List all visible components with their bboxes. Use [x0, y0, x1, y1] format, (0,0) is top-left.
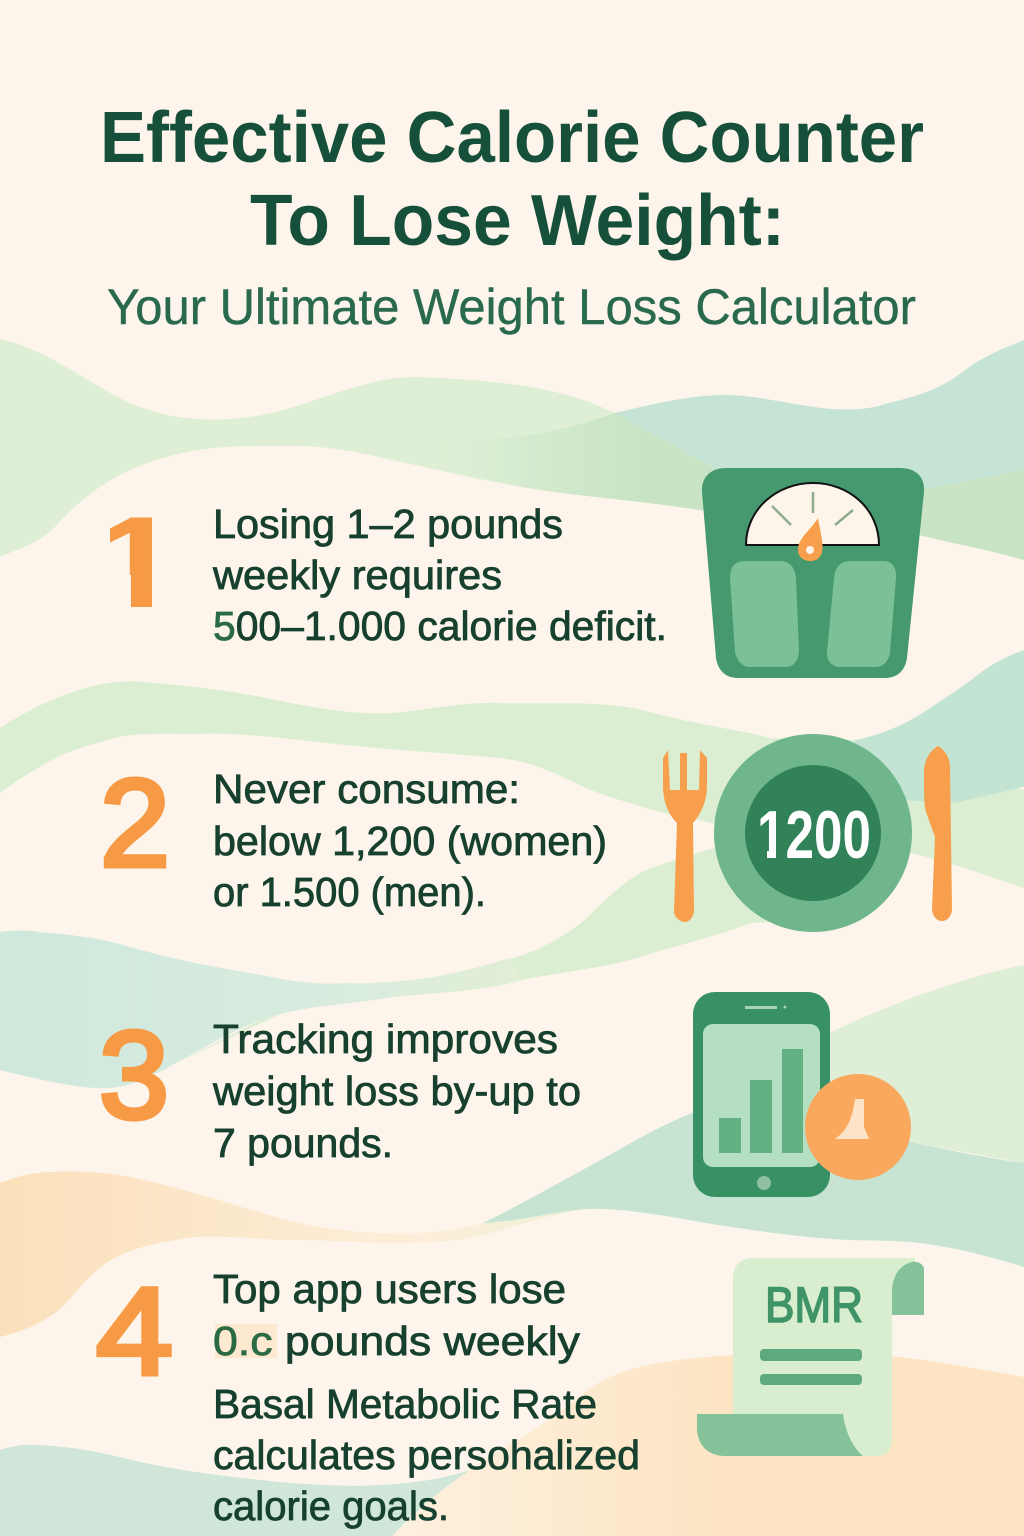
- icon: knife: [924, 746, 952, 921]
- highlight behind 0.c: [215, 1324, 277, 1358]
- wave: top light green: [0, 339, 1024, 560]
- text block 4: 0.c pounds weekly: [213, 1318, 581, 1364]
- icon: plate with 1200: 1200: [757, 797, 871, 873]
- icon: BMR document: BMR: [765, 1277, 863, 1333]
- text block 1: Losing 1–2 pounds: [213, 501, 563, 547]
- icon: fork: [663, 750, 707, 922]
- wave: lower right blue green: [483, 1100, 1024, 1267]
- background waves: [0, 339, 1024, 1536]
- text block 4: Basal Metabolic Rate: [213, 1381, 597, 1427]
- item 1: [92, 468, 924, 678]
- wave: lower right orange: [392, 1352, 1024, 1536]
- icon: bathroom scale: [702, 468, 924, 678]
- title: [100, 98, 924, 261]
- wave: middle light green: [0, 681, 1024, 888]
- item 2: [100, 734, 952, 932]
- text block 2: Never consume:: [213, 766, 520, 812]
- text block 4: [213, 1266, 640, 1529]
- wave: right light green: [692, 965, 1024, 1163]
- icon: plate with 1200: [714, 734, 912, 932]
- text block 2: below 1,200 (women): [213, 818, 607, 864]
- text block 2: or 1.500 (men).: [213, 869, 486, 915]
- text block 1: [212, 501, 667, 649]
- text block 2: [213, 766, 607, 915]
- wave: lower middle light green: [176, 845, 810, 1063]
- icon: orange badge: [805, 1074, 911, 1180]
- item 4: [96, 1258, 924, 1529]
- text block 3: 7 pounds.: [213, 1120, 393, 1166]
- number 3: 3: [99, 1007, 169, 1145]
- title: To Lose Weight:: [250, 181, 785, 261]
- number 1: 1: [92, 489, 182, 635]
- text block 4: calculates persohalized: [213, 1432, 640, 1478]
- number 2: 2: [100, 755, 170, 893]
- bar chart: [719, 1049, 803, 1153]
- text block 3: weight loss by-up to: [212, 1068, 581, 1114]
- subtitle: Your Ultimate Weight Loss Calculator: [107, 279, 916, 335]
- icon: phone with bar chart: [693, 992, 911, 1197]
- wave: left orange: [0, 1171, 588, 1337]
- wave: left blue: [0, 930, 522, 1088]
- wave: top blue green: [614, 340, 1024, 490]
- icon: BMR document: [697, 1258, 924, 1456]
- item 3: [99, 992, 911, 1197]
- text block 4: Top app users lose: [213, 1266, 566, 1312]
- wave: top darker overlap: [440, 413, 1024, 560]
- number 4: 4: [96, 1263, 173, 1401]
- title: Effective Calorie Counter: [100, 98, 924, 178]
- text block 1: weekly requires: [212, 552, 502, 598]
- text block 3: [212, 1016, 581, 1166]
- text block 3: Tracking improves: [213, 1016, 558, 1062]
- wave: lower left green: [0, 1445, 470, 1536]
- text block 4: calorie goals.: [213, 1483, 449, 1529]
- wave: middle right blue green: [840, 650, 1024, 803]
- text block 1: 500–1.000 calorie deficit.: [213, 603, 667, 649]
